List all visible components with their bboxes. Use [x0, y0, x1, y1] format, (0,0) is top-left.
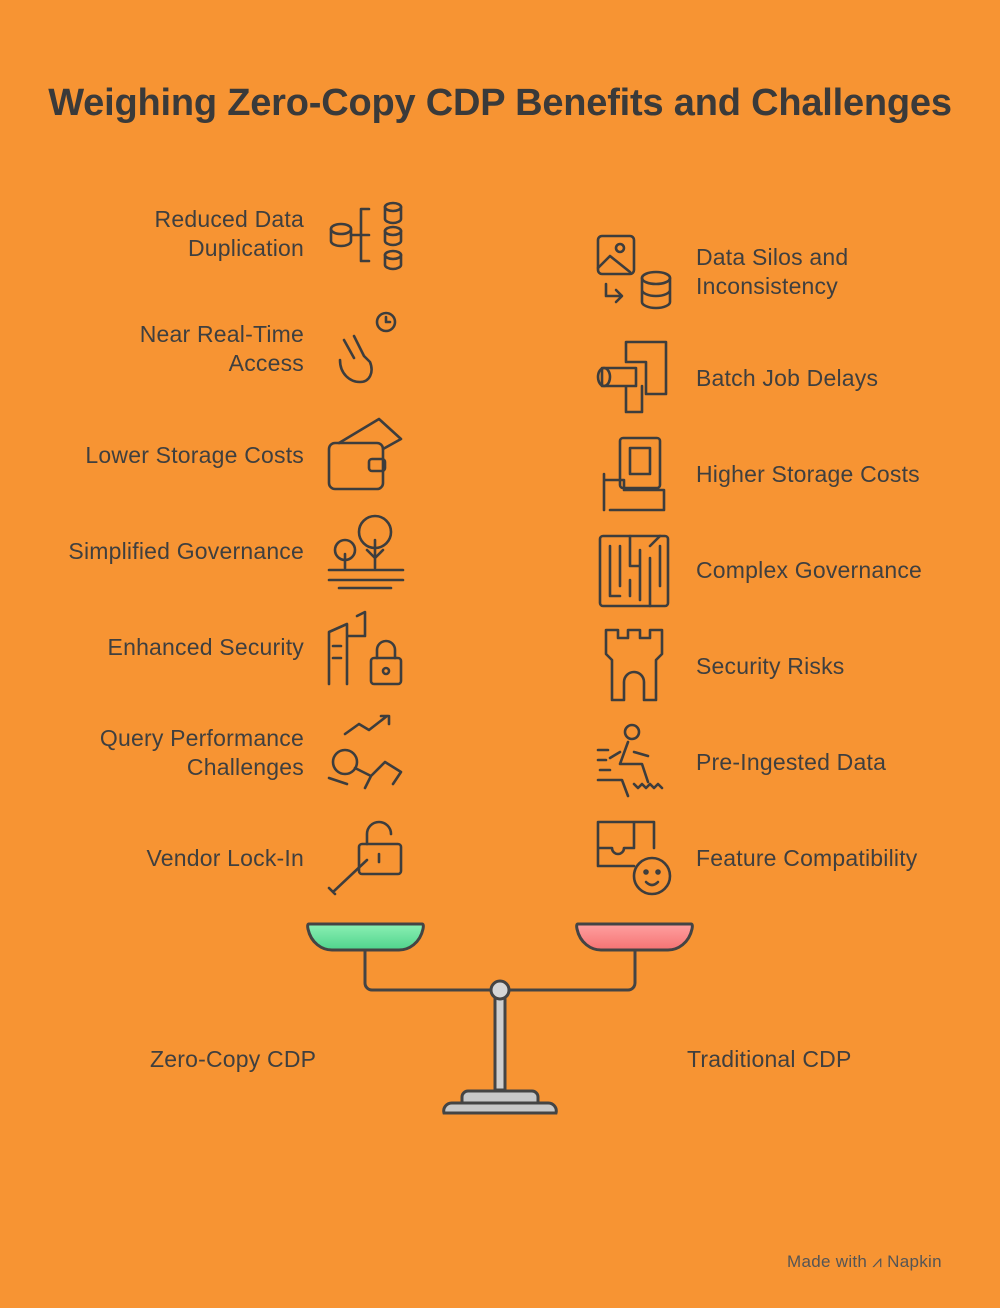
- label: Zero-Copy CDP: Zero-Copy CDP: [150, 1046, 316, 1072]
- icon: hand clock: [338, 312, 396, 384]
- right icon: pipe: [596, 340, 668, 414]
- left label: Reduced Data Duplication: Duplication: [188, 235, 304, 261]
- left label: Vendor Lock-In: Vendor Lock-In: [146, 845, 304, 871]
- right label: Higher Storage Costs: Higher Storage Costs: [696, 461, 920, 487]
- title: Weighing Zero-Copy CDP Benefits and Challenges: [48, 82, 952, 124]
- right label: Data Silos and Inconsistency: Inconsistency: [696, 273, 838, 299]
- icon: wallet: [328, 418, 402, 490]
- red pan: [577, 924, 692, 950]
- icon: buildings lock: [328, 610, 402, 686]
- left label: Near Real-Time Access: Near Real-Time: [140, 321, 304, 347]
- left label: Reduced Data Duplication: [155, 206, 304, 261]
- left label: Reduced Data Duplication: Reduced Data: [155, 206, 304, 232]
- right label: Pre-Ingested Data: Pre-Ingested Data: [696, 749, 886, 775]
- right icon: money box: [602, 436, 666, 512]
- right label: Batch Job Delays: Batch Job Delays: [696, 365, 878, 391]
- left label: Query Performance Challenges: [100, 725, 304, 780]
- right icon: puzzle face: [596, 820, 672, 896]
- right icon: jumping figure: [596, 724, 664, 798]
- label: Traditional CDP: Traditional CDP: [687, 1046, 851, 1072]
- icon: databases: [330, 202, 402, 270]
- left label: Simplified Governance: Simplified Governance: [68, 538, 304, 564]
- right label: Data Silos and Inconsistency: Data Silos and: [696, 244, 848, 270]
- footer: Made with Napkin: Made with ⩘ Napkin: [787, 1252, 942, 1271]
- scale: [306, 922, 694, 1114]
- right label: Feature Compatibility: Feature Compatibility: [696, 845, 918, 871]
- icon: trees: [328, 514, 404, 590]
- left label: Near Real-Time Access: [140, 321, 304, 376]
- right label: Complex Governance: Complex Governance: [696, 557, 922, 583]
- left label: Lower Storage Costs: Lower Storage Costs: [85, 442, 304, 468]
- left label: Query Performance Challenges: Query Performance: [100, 725, 304, 751]
- left label: Enhanced Security: Enhanced Security: [108, 634, 304, 660]
- right label: Data Silos and Inconsistency: [696, 244, 848, 299]
- right icon: image to database: [596, 234, 672, 310]
- icon: key lock: [328, 820, 402, 896]
- left label: Query Performance Challenges: Challenges: [187, 754, 304, 780]
- right label: Security Risks: Security Risks: [696, 653, 844, 679]
- green pan: [308, 924, 423, 950]
- left label: Near Real-Time Access: Access: [229, 350, 304, 376]
- right icon: maze: [598, 534, 670, 608]
- icon: crawling figure trend: [328, 714, 402, 790]
- right icon: tower: [604, 628, 664, 702]
